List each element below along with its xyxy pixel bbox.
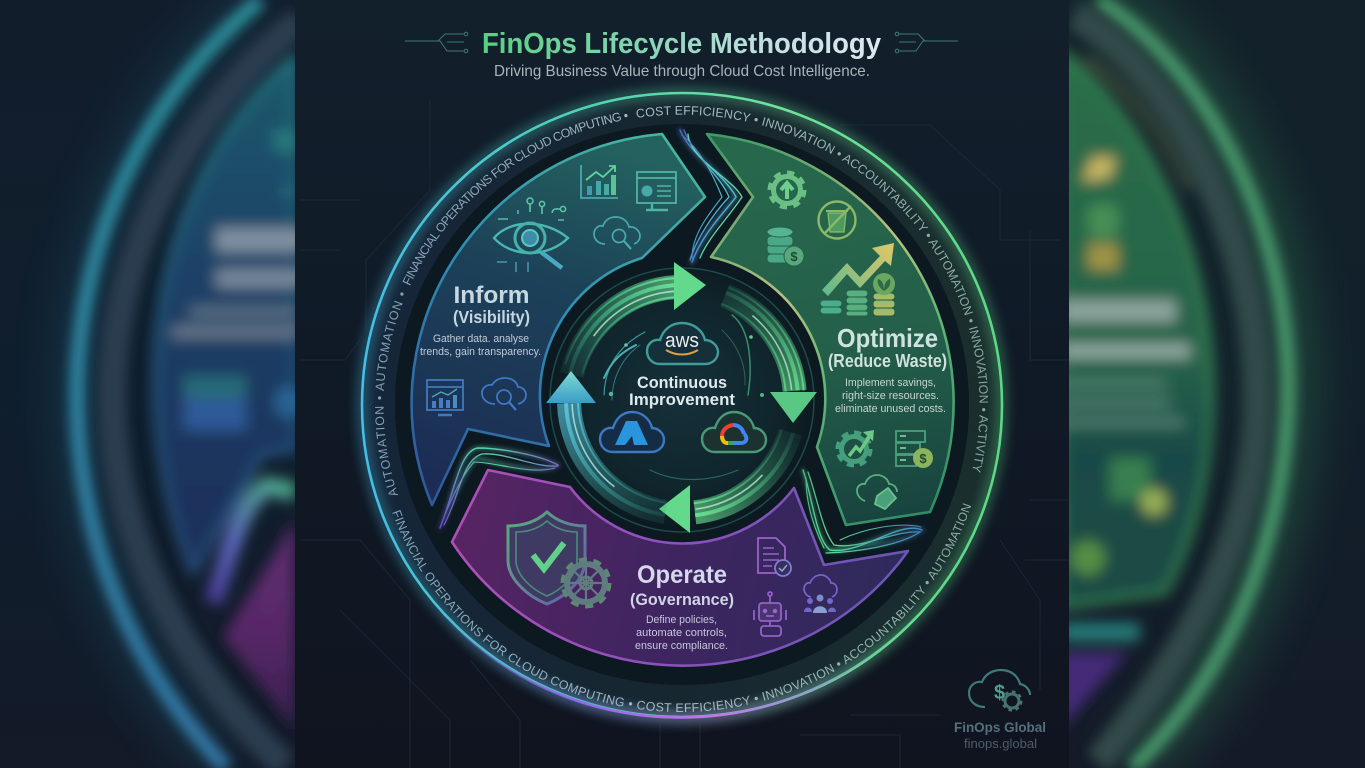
center heading: Improvement bbox=[629, 390, 735, 409]
panel: operate bbox=[452, 470, 908, 666]
arrow: bottom bbox=[566, 284, 798, 533]
icon: cloud magnifier bbox=[482, 378, 526, 410]
optimize heading: Optimize bbox=[837, 323, 938, 353]
inform heading: Inform bbox=[454, 282, 530, 309]
swoosh: inform to optimize bbox=[680, 130, 742, 262]
icon: governance gear bbox=[563, 560, 609, 606]
icon: aws cloud bbox=[647, 323, 718, 364]
ring text top left arc: FINANCIAL OPERATIONS FOR CLOUD COMPUTING • bbox=[402, 112, 628, 286]
center hub bbox=[546, 262, 817, 533]
swoosh: optimize to operate bbox=[803, 470, 922, 553]
icon: shield with check bbox=[508, 512, 585, 604]
icon: gear with check trend bbox=[838, 430, 874, 465]
icon: dashboard monitor bbox=[637, 172, 676, 210]
ring text bottom: FINANCIAL OPERATIONS FOR CLOUD COMPUTING • COST EFFICIENCY • INNOVATION • ACCOUNTABILITY • AUTOMATION bbox=[392, 503, 972, 712]
optimize subheading: (Reduce Waste) bbox=[828, 351, 947, 371]
inform description: trends, gain transparency. bbox=[420, 346, 541, 358]
subtitle: Driving Business Value through Cloud Cost Intelligence. bbox=[494, 63, 870, 80]
icon: bar chart trend bbox=[581, 165, 618, 198]
inner dark disc bbox=[395, 124, 969, 684]
swoosh: operate to inform bbox=[440, 448, 558, 528]
optimize description: Implement savings, bbox=[845, 377, 936, 389]
operate subheading: (Governance) bbox=[630, 590, 734, 609]
title decoration left bbox=[405, 32, 468, 53]
logo url: finops.global bbox=[964, 736, 1037, 751]
continuous improvement arrows bbox=[546, 262, 817, 533]
icon: coin stack with dollar: $ bbox=[790, 249, 798, 264]
operate description: ensure compliance. bbox=[635, 640, 728, 652]
icon: azure cloud bbox=[600, 412, 664, 452]
icon: cloud team bbox=[804, 575, 837, 613]
arrow: right bbox=[560, 278, 817, 522]
optimize description bbox=[835, 377, 946, 415]
operate description: automate controls, bbox=[636, 627, 727, 639]
icon: google cloud bbox=[702, 412, 766, 452]
panel: inform bbox=[412, 134, 705, 505]
background circuit lines bbox=[300, 100, 1069, 768]
operate description bbox=[635, 614, 728, 652]
arrow: left bbox=[546, 284, 798, 516]
title decoration right bbox=[895, 32, 958, 53]
icon: cloud search bbox=[594, 217, 640, 249]
arrow: top bbox=[560, 262, 804, 522]
icon: policy document bbox=[758, 538, 791, 576]
panel: optimize bbox=[707, 134, 954, 525]
title: FinOps Lifecycle Methodology bbox=[482, 28, 881, 60]
icon: gear with up arrow bbox=[770, 173, 804, 207]
ring text top right arc: COST EFFICIENCY • INNOVATION • ACCOUNTABILITY • AUTOMATION • INNOVATION • ACTIVITY bbox=[636, 106, 988, 473]
icon: aws cloud: aws bbox=[665, 330, 699, 352]
optimize description: eliminate unused costs. bbox=[835, 403, 946, 415]
icon: no waste bin bbox=[818, 202, 856, 238]
ring text top left: AUTOMATION • AUTOMATION • bbox=[375, 292, 404, 496]
logo: finops global bbox=[954, 670, 1046, 751]
inform description: Gather data. analyse bbox=[433, 333, 529, 345]
icon: growth arrow with coins bbox=[820, 243, 895, 316]
inform description bbox=[420, 333, 541, 358]
inform subheading: (Visibility) bbox=[453, 307, 530, 327]
logo name: FinOps Global bbox=[954, 719, 1046, 735]
icon: coin stack with dollar bbox=[767, 227, 804, 266]
lifecycle diagram bbox=[350, 82, 1014, 730]
icon: robot bbox=[754, 592, 786, 636]
icon: server with dollar bbox=[896, 431, 933, 468]
main panel background bbox=[295, 0, 1069, 768]
icon: cloud with dollar and gear: $ bbox=[994, 682, 1005, 704]
icon: server with dollar: $ bbox=[919, 451, 927, 466]
inner light streaks bbox=[604, 315, 764, 479]
icon: cloud tag bbox=[857, 475, 897, 509]
operate description: Define policies, bbox=[646, 614, 717, 626]
blurred background: left enlarged view bbox=[0, 0, 682, 768]
blurred background: right enlarged view bbox=[682, 0, 1365, 768]
operate heading: Operate bbox=[637, 561, 727, 589]
outer glowing ring bbox=[362, 93, 1002, 717]
center heading bbox=[629, 373, 735, 409]
icon: eye with magnifier bbox=[494, 198, 568, 272]
icon: analytics monitor bbox=[427, 380, 463, 415]
optimize description: right-size resources. bbox=[842, 390, 939, 402]
center heading: Continuous bbox=[637, 373, 727, 392]
